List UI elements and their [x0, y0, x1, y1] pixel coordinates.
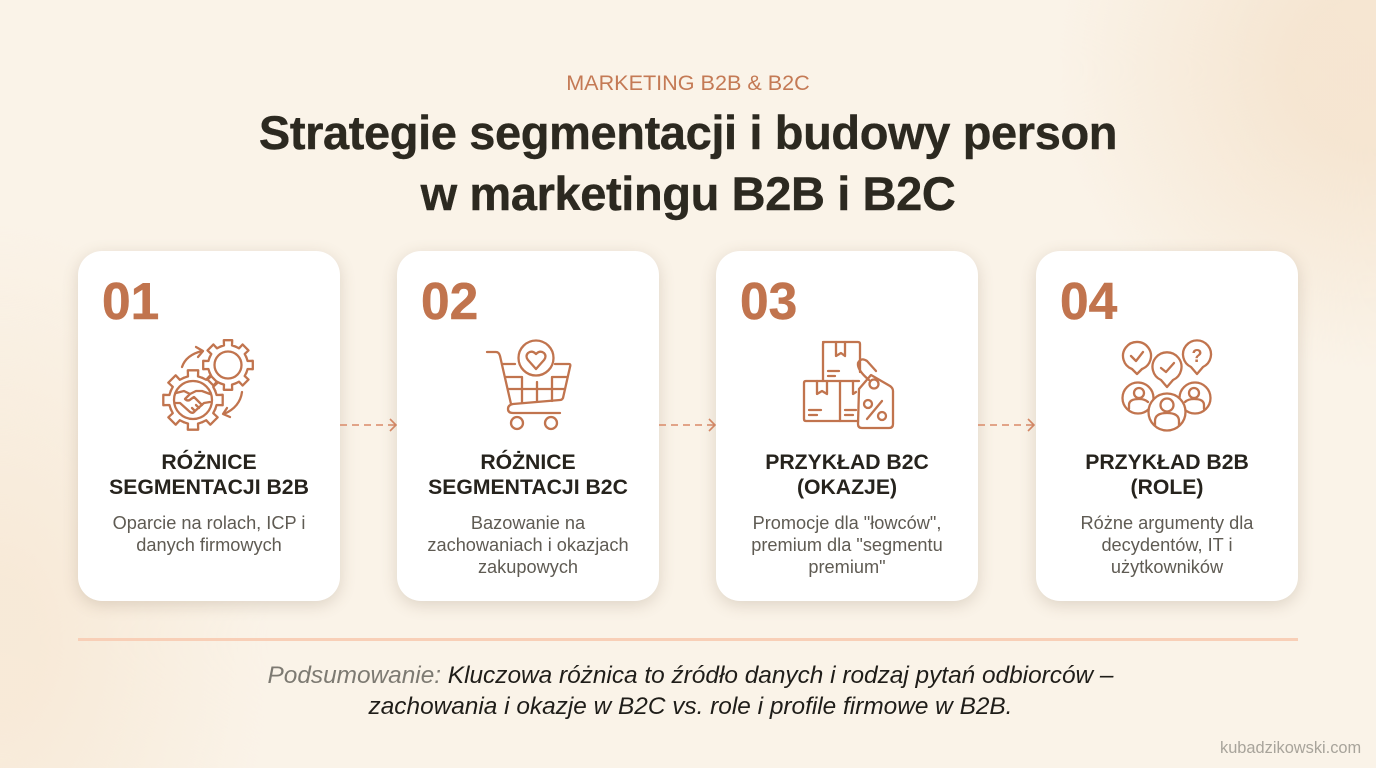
arrow 1 to 2: [340, 418, 397, 432]
number 04: 04: [1060, 272, 1117, 330]
description: [1081, 513, 1254, 577]
title: [259, 106, 1117, 220]
panel: card 04: [1036, 251, 1298, 601]
description: [751, 513, 943, 577]
number 02: 02: [421, 272, 478, 330]
number 01: 01: [102, 272, 159, 330]
heading: SEGMENTACJI B2C: [428, 476, 628, 499]
heading: PRZYKŁAD B2C: [765, 451, 929, 474]
heading: SEGMENTACJI B2B: [109, 476, 309, 499]
arrow 3 to 4: [978, 418, 1035, 432]
description: decydentów, IT i: [1101, 535, 1233, 555]
panel: card 01: [78, 251, 340, 601]
icon: shopping cart with heart: [486, 339, 572, 430]
title: w marketingu B2B i B2C: [421, 166, 955, 220]
description: Bazowanie na: [471, 513, 585, 533]
heading: [109, 450, 309, 499]
description: premium dla "segmentu: [751, 535, 943, 555]
heading: (ROLE): [1131, 476, 1203, 499]
description: użytkowników: [1111, 557, 1223, 577]
summary text: [267, 662, 1114, 720]
heading: [428, 450, 628, 499]
icon: gears with handshake: [162, 339, 254, 431]
description: Promocje dla "łowców",: [753, 513, 941, 533]
description: danych firmowych: [136, 535, 282, 555]
number 03: 03: [740, 272, 797, 330]
icon: group of people with speech bubbles: [1121, 339, 1212, 432]
divider: [78, 638, 1298, 641]
description: [427, 513, 629, 577]
heading: [765, 451, 929, 499]
heading: (OKAZJE): [797, 476, 897, 499]
description: zakupowych: [478, 557, 578, 577]
heading: [1085, 451, 1249, 499]
description: Oparcie na rolach, ICP i: [113, 513, 305, 533]
panel: card 03: [716, 251, 978, 601]
watermark: kubadzikowski.com: [1220, 739, 1361, 757]
icon: group of people with speech bubbles: ?: [1192, 346, 1202, 366]
description: [113, 513, 305, 555]
title: Strategie segmentacji i budowy person: [259, 106, 1117, 159]
heading: RÓŻNICE: [480, 451, 576, 474]
description: zachowaniach i okazjach: [427, 535, 629, 555]
heading: PRZYKŁAD B2B: [1085, 451, 1249, 474]
summary text: zachowania i okazje w B2C vs. role i profile firmowe w B2B.: [369, 692, 1012, 720]
arrow 2 to 3: [659, 418, 716, 432]
description: Różne argumenty dla: [1081, 513, 1253, 533]
eyebrow label: MARKETING B2B & B2C: [566, 70, 810, 95]
icon: boxes with percent tag: [802, 340, 894, 430]
description: premium": [808, 557, 886, 577]
panel: card 02: [397, 251, 659, 601]
summary text: Podsumowanie: Kluczowa różnica to źródło danych i rodzaj pytań odbiorców –: [267, 662, 1114, 689]
heading: RÓŻNICE: [161, 451, 257, 474]
